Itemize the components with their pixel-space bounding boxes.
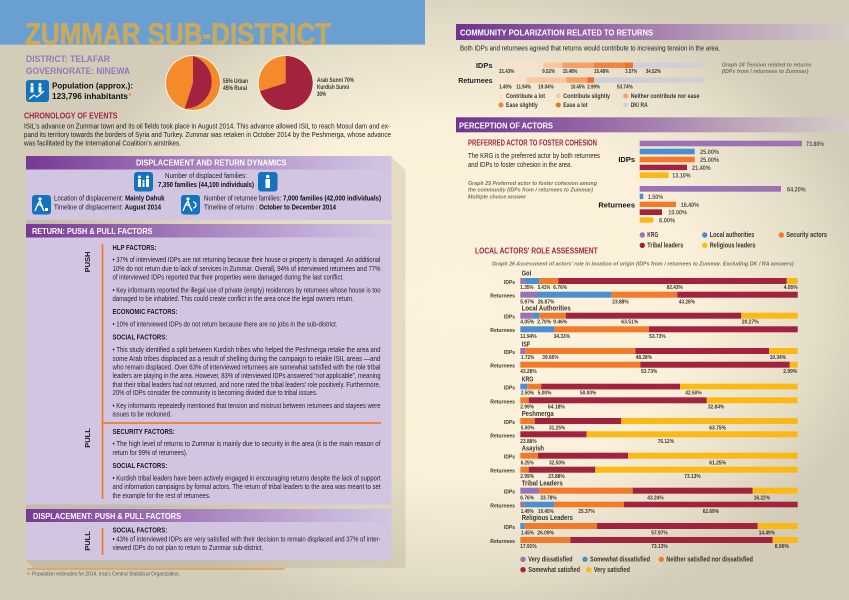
IDPs bars: 25.00% [700,158,720,164]
panel: perception of actors [456,117,849,132]
group: Religious Leaders [490,515,798,550]
group: Religious Leaders: 17.91% [520,544,537,550]
pull factors text: the example for the rest of returnees. [112,493,211,500]
tension legend: Neither contribute nor ease [631,94,700,100]
group: ISF: Returnees [490,364,515,370]
pie chart: ethnic composition [258,55,314,111]
IDPs bars: IDPs [618,155,635,164]
push factors text: • Key informants reported the illegal use of private (empty) residences by returnees whose house is too [112,288,381,294]
group: Peshmerga: 5.00% [521,425,534,431]
group: Religious Leaders: Religious Leaders [522,515,573,522]
IDPs row: IDPs [476,61,492,70]
IDPs row: 15.48% [563,69,577,75]
satisfaction legend: Somewhat dissatisfied [590,556,650,564]
stacked bar chart: actors' role assessment [490,270,798,574]
icon: family [134,172,153,192]
preferred actor text: The KRG is the preferred actor by both returnees [468,151,600,160]
heading: preferred actor: PREFERRED ACTOR TO FOSTER COHESION [468,138,597,148]
group: Religious Leaders: 73.13% [651,544,668,550]
returnees row: 2.99% [587,84,600,90]
icon: population [26,80,49,102]
returnee text [204,196,381,212]
IDPs row [476,61,703,75]
panel heading: DISPLACEMENT AND RETURN DYNAMICS [136,158,287,168]
group: Asayish: 32.50% [549,460,565,466]
panel heading: RETURN: PUSH & PULL FACTORS [32,227,153,236]
social factors text: SOCIAL FACTORS: [112,528,167,534]
push factors text: issues to be reckoned. [112,412,172,418]
caption: graph 25: the community (IDPs from / returnees to Zummar) [468,188,593,194]
satisfaction legend: Somewhat satisfied [528,567,580,574]
group: ISF [490,342,798,375]
actors legend: Local authorities [710,232,754,239]
group: Local Authorities: 2.70% [537,320,551,326]
group: Gol: 23.88% [612,299,629,305]
group: Peshmerga: 23.88% [520,439,537,445]
returnees bars: 16.40% [681,203,700,209]
tension legend: Contribute slightly [563,94,611,100]
group: Gol: 5.97% [520,299,534,305]
pie labels: ethnic composition [317,78,355,98]
group: Gol: 6.76% [553,285,567,291]
group: Gol: 26.87% [538,299,554,305]
actors legend: KRG [647,232,659,239]
push factors text: some Arab tribes displaced as a result of shelling during the campaign to retake ISIL areas —and [112,356,381,363]
group: Local Authorities: 9.46% [553,320,567,326]
displacement location text: Location of displacement: Mainly Dahuk [54,196,165,202]
returnees row: 53.74% [617,84,633,90]
district and governorate [26,54,130,76]
district and governorate: DISTRICT: TELAFAR [26,54,110,64]
IDPs bars: 21.40% [692,166,711,172]
group: Tribal Leaders: 62.69% [703,509,719,515]
group: Local Authorities: IDPs [504,315,515,321]
push factors text: leaders are playing in the area. However, 83% of interviewed IDPs answered “not applicable”, meaning [112,373,381,380]
actors legend: Security actors [786,232,827,239]
pull label: PULL [83,428,92,448]
pull label: PULL [83,531,92,551]
group: Tribal Leaders: 6.76% [520,495,534,501]
group: KRG: KRG [522,376,534,384]
group: KRG: 32.84% [708,405,724,411]
group: Peshmerga: 63.75% [709,425,726,431]
group: Religious Leaders: 8.96% [775,544,789,550]
pie labels: urban and rural: 45% Rural [223,86,247,92]
chronology text [23,124,391,148]
IDPs row: 9.52% [542,69,555,75]
group: Asayish: 23.88% [548,474,565,480]
group: KRG: 50.00% [580,391,596,397]
social factors text: viewed IDPs do not plan to return to Zummar sub-district. [112,545,263,552]
group: Asayish [490,446,798,480]
group: Tribal Leaders: 10.45% [538,509,554,515]
pull factors text: • The high level of returns to Zummar is mainly due to security in the area (it is the main reason of [112,441,381,448]
caption: graph 25: Multiple choice answer [468,194,527,200]
group: Tribal Leaders: 16.22% [754,495,770,501]
pie labels: ethnic composition: 30% [317,92,326,98]
satisfaction legend: Neither satisfied nor dissatisfied [666,556,753,564]
group: Asayish: 2.99% [520,474,534,480]
group: Gol: IDPs [504,280,515,286]
pie labels: ethnic composition: Kurdish Sunni [317,85,349,91]
heading: local actors: LOCAL ACTORS' ROLE ASSESSMENT [475,246,598,256]
panel: displacement and return dynamics [26,156,392,220]
group: Local Authorities: 4.05% [520,320,534,326]
displacement location text: Timeline of displacement: August 2014 [54,204,161,212]
population text [52,82,133,101]
pull factors text: return for 99% of returnees). [112,450,188,457]
group: KRG: 42.50% [685,391,702,397]
returnees bars: 64.20% [787,188,806,194]
pull factors text [112,429,381,500]
returnees row: 10.45% [571,84,585,90]
population text: * [128,93,132,100]
group: Tribal Leaders: Tribal Leaders [522,480,563,488]
group: Local Authorities: Local Authorities [522,306,571,312]
group: KRG: Returnees [490,399,515,405]
returnees row: 19.04% [538,84,554,90]
caption: graph 24: Graph 24 Tension related to returns [722,62,812,68]
push factors text: who remain displaced. Over 63% of interviewed returnees are somewhat satisfied with the role tribal [112,364,381,372]
returnees bars: 10.00% [668,211,688,217]
IDPs row: 3.57% [625,69,637,75]
push factors text: • Key informants repeatedly mentioned that tension and mistrust between returnees and stayees were [112,403,381,410]
group: ISF: ISF [522,342,531,348]
preferred actor text [468,151,600,169]
group: Religious Leaders: 1.45% [521,530,534,536]
caption: graph 25: Graph 25 Preferred actor to foster cohesion among [468,181,598,187]
footnote: Population estimates for 2014. Iraq's Central Statistical Organization. [32,572,180,578]
group: ISF: 43.28% [520,369,537,375]
satisfaction legend [520,556,753,574]
group: Asayish: IDPs [504,455,515,461]
pie labels: urban and rural: 55% Urban [223,79,248,85]
group: Asayish: 6.25% [521,460,534,466]
group: Gol: Returnees [490,294,515,300]
push factors text [112,245,381,418]
pull factors text: and information campaigns by formal actors. The return of tribal leaders to the area was meant to set [112,484,381,491]
push factors text: SOCIAL FACTORS: [112,335,167,342]
group: Asayish: Returnees [490,469,515,475]
pull factors text: SECURITY FACTORS: [112,429,175,436]
group: Religious Leaders: IDPs [504,525,515,531]
IDPs bars: 13.10% [672,174,691,180]
tension legend: Contribute a lot [506,94,545,100]
push factors text: that their tribal leaders had not returned, and none rated the tribal leaders’ role positively. Furthermore, [112,382,381,389]
group: Asayish: 73.13% [684,474,701,480]
tension legend: DK/ RA [631,103,648,109]
group: Gol: 43.28% [679,299,695,305]
pull factors text: SOCIAL FACTORS: [112,463,167,470]
push factors text: HLP FACTORS: [112,245,156,252]
panel shadow [26,156,406,568]
group: KRG: 2.99% [520,405,534,411]
satisfaction legend: Very dissatisfied [528,556,573,564]
IDPs bars [618,141,825,180]
returnee text: Timeline of returns : October to December 2014 [204,204,336,212]
group: Gol: GoI [522,270,531,278]
group: ISF: IDPs [504,350,515,356]
group: Peshmerga: Peshmerga [522,411,554,418]
group: ISF: 48.28% [636,355,652,361]
IDPs row: 15.48% [594,69,609,75]
group: Tribal Leaders: 43.24% [647,495,664,501]
group: ISF: 2.99% [783,369,797,375]
caption: graph 25 [468,181,598,200]
tension legend: Ease a lot [563,103,588,109]
preferred actor text: and IDPs to foster cohesion in the area. [468,160,572,169]
polarization text: Both IDPs and returnees agreed that returns would contribute to increasing tension in the area. [460,44,720,52]
displaced families text: Number of displaced families: [165,173,247,180]
population text: 123,796 inhabitants [52,92,129,101]
pull factors text: • Kurdish tribal leaders have been actively engaged in encouraging returns despite the lack of support [112,476,381,482]
group: Religious Leaders: 57.97% [651,530,668,536]
returnees bars: Returnees [598,200,635,210]
returnees row: 1.49% [499,84,512,90]
actors legend: Tribal leaders [647,242,683,249]
pie chart: urban and rural [165,55,221,111]
push label: PUSH [83,252,92,272]
push factors text: ECONOMIC FACTORS: [112,309,178,316]
group: Local Authorities: 34.33% [554,334,570,340]
displacement location text [54,196,165,212]
panel: displacement push and pull factors [26,509,392,560]
tension legend: Ease slightly [506,103,538,109]
population text: Population (approx.): [52,82,133,90]
group: Local Authorities: 20.27% [742,320,759,326]
returnees bars: 1.50% [648,195,664,201]
returnees row [458,77,703,90]
group: Tribal Leaders: 1.49% [521,509,534,515]
group: KRG [490,376,798,411]
icon: person [258,172,278,192]
panel: community polarization [456,24,849,40]
push factors text: damaged to be inhabited. This could create conflict in the area once the legal owners return. [112,296,354,303]
group: Gol: 82.43% [667,285,683,291]
chart: tension related to returns [458,61,703,109]
pie labels: urban and rural [223,79,248,92]
group: Religious Leaders: Returnees [490,539,515,545]
group: Peshmerga: IDPs [504,420,515,426]
group: Local Authorities: 63.51% [621,320,638,326]
caption: graph 24 [722,62,812,75]
icon: walking away [32,195,51,214]
satisfaction legend: Very satisfied [594,567,630,574]
icon: returning [181,195,200,214]
panel: return push and pull factors [26,224,392,504]
title: ZUMMAR SUB-DISTRICT [25,17,331,51]
group: Gol [490,270,798,305]
group: Gol: 5.41% [538,285,550,291]
push factors text: • 37% of interviewed IDPs are not returning because their house or property is damaged. An additional [112,257,381,264]
group: Local Authorities [490,306,798,340]
push factors text: 10% do not return due to lack of services in Zummar. Overall, 94% of interviewed returnees and 77% [112,266,380,273]
push factors text: • This study identified a split between Kurdish tribes who helped the Peshmerga retake the area and [112,347,381,354]
actors legend [640,232,827,249]
group: KRG: IDPs [504,386,515,392]
group: Tribal Leaders [490,480,798,515]
group: Local Authorities: Returnees [490,328,515,334]
displaced families text: 7,350 families (44,100 individuals) [158,182,254,189]
bar chart: preferred actor [598,141,827,249]
panel heading: PERCEPTION OF ACTORS [459,122,554,130]
returnees row: 11.94% [516,84,531,90]
group: ISF: 10.34% [770,355,786,361]
chronology text: pand its territory towards the borders of Syria and Turkey. Zummar was retaken in October 2014 by the Peshmerga, whose advance [24,132,391,139]
actors legend: Religious leaders [710,242,755,249]
heading: chronology: CHRONOLOGY OF EVENTS [24,112,118,120]
push/pull divider [102,244,381,499]
IDPs row: 34.52% [646,69,661,75]
returnees bars: 6.00% [659,218,676,224]
group: Gol: 1.35% [520,285,534,291]
group: Tribal Leaders: IDPs [504,490,515,496]
push factors text: of interviewed IDPs reported that their properties were damaged during the last conflict. [112,275,344,282]
group: Tribal Leaders: 25.37% [578,509,595,515]
group: Peshmerga: Returnees [490,433,515,439]
group: Religious Leaders: 14.49% [759,530,775,536]
group: Tribal Leaders: 33.78% [540,495,557,501]
displaced families text [158,173,254,189]
IDPs bars: 73.80% [806,142,825,148]
group: KRG: 5.00% [538,391,551,397]
group: Gol: 4.05% [784,285,798,291]
group: ISF: 1.72% [521,355,534,361]
panel heading: DISPLACEMENT: PUSH & PULL FACTORS [33,512,182,521]
IDPs row: 21.43% [499,69,514,75]
pie labels: ethnic composition: Arab Sunni 70% [317,78,355,84]
group: Tribal Leaders: Returnees [490,504,515,510]
returnee text: Number of returnee families: 7,000 families (42,000 individuals) [204,196,381,202]
group: KRG: 64.18% [548,405,565,411]
group: Asayish: 61.25% [709,460,726,466]
group: ISF: 39.66% [542,355,559,361]
divider [102,528,104,555]
group: Asayish: Asayish [522,446,544,452]
push factors text: • 10% of interviewed IDPs do not return because there are no jobs in the sub-district. [112,322,338,328]
tension legend [498,94,700,109]
district and governorate: GOVERNORATE: NINEWA [26,66,130,76]
group: KRG: 2.50% [521,391,534,397]
chronology text: was facilitated by the International Coalition's airstrikes. [23,140,181,148]
chronology text: ISIL's advance on Zummar town and its oil fields took place in August 2014. This advance allowed ISIL to reach Mosul dam and ex- [24,124,391,130]
push factors text: 20% of IDPs consider the community is becoming divided due to tribal issues. [112,390,318,397]
panel heading: COMMUNITY POLARIZATION RELATED TO RETURNS [460,28,654,38]
returnees row: Returnees [458,78,493,85]
social factors text [112,528,381,552]
group: Peshmerga [490,411,798,445]
blue title band [0,0,425,45]
group: Peshmerga: 31.25% [549,425,565,431]
group: Peshmerga: 76.12% [658,439,674,445]
group: ISF: 53.73% [641,369,657,375]
IDPs bars: 25.00% [700,150,720,156]
group: Religious Leaders: 26.09% [537,530,554,536]
returnees bars [598,186,806,224]
group: Local Authorities: 53.73% [649,334,666,340]
caption: graph 24: (IDPs from / returnees to Zummar) [722,69,809,75]
caption: graph 26: Graph 26 Assessment of actors' role in location of origin (IDPs from / returnees to Zummar. Excluding DK / RA answers) [492,261,794,267]
social factors text: • 43% of interviewed IDPs are very satisfied with their decision to remain displaced and 37% of inter- [112,536,381,544]
group: Local Authorities: 11.94% [520,334,537,340]
